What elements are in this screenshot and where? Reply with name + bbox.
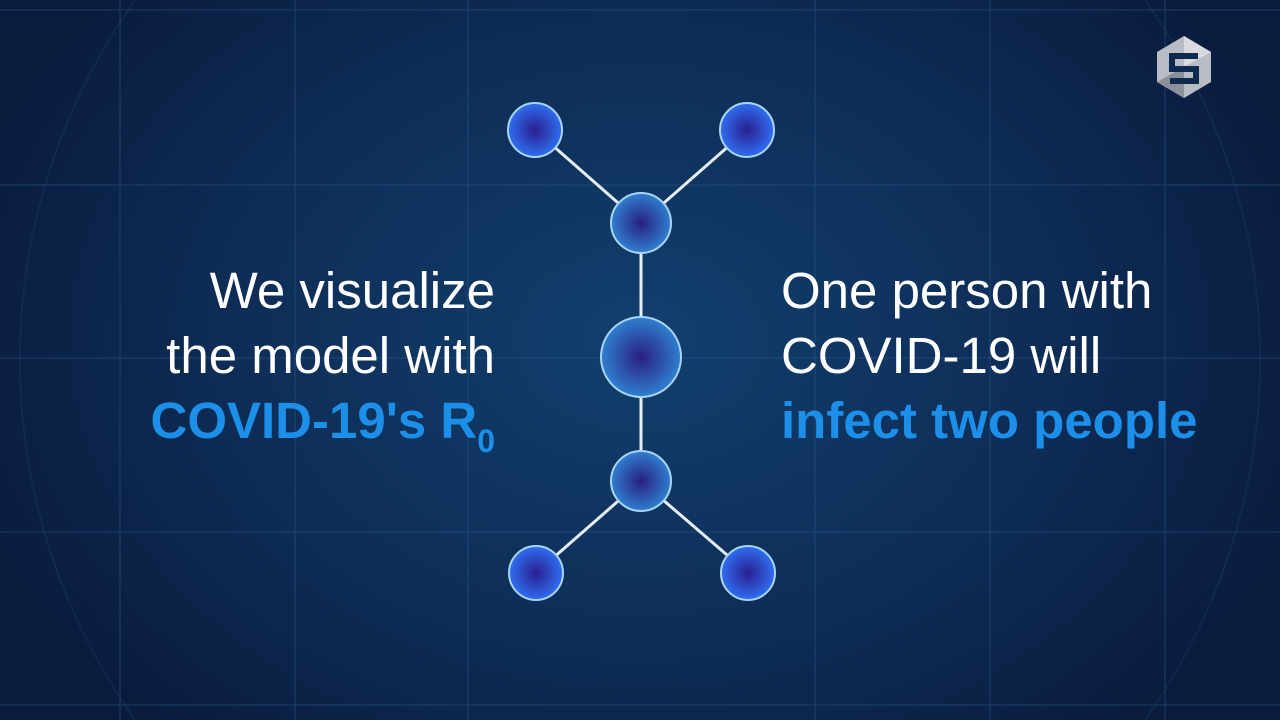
right text: infect two people [781, 392, 1198, 449]
right text [781, 262, 1198, 449]
right text: COVID-19 will [781, 327, 1101, 384]
left text: COVID-19's R0 [150, 392, 495, 459]
logo [1157, 36, 1211, 98]
network diagram [508, 103, 775, 600]
right text: One person with [781, 262, 1152, 319]
left text [150, 262, 495, 459]
left text: We visualize [210, 262, 495, 319]
left text: the model with [166, 327, 495, 384]
